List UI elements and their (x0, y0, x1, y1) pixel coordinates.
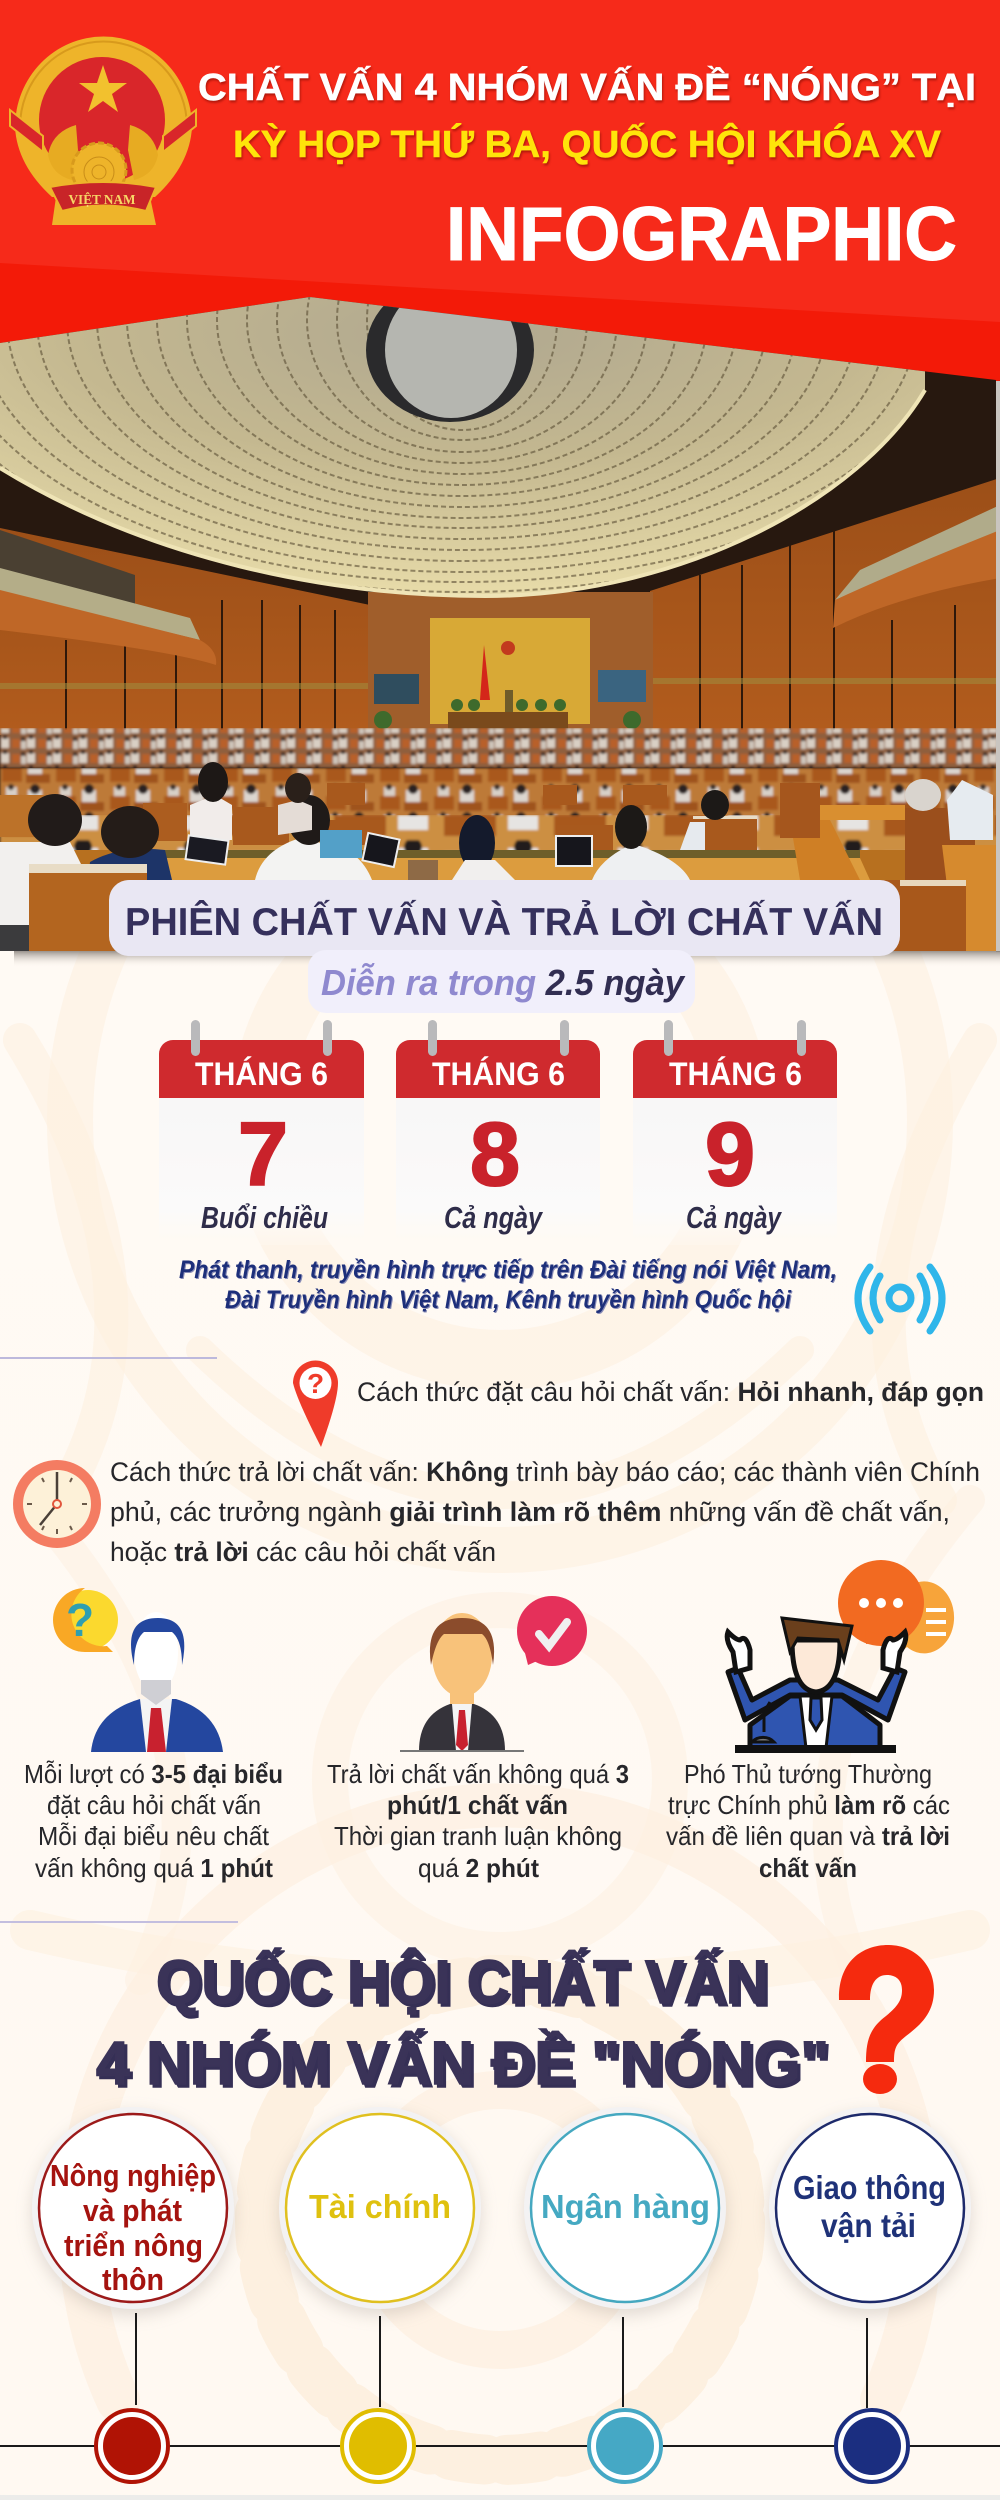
icon: answering official (400, 1596, 587, 1752)
icon: delegate asking question: ? (66, 1594, 94, 1646)
section heading: four hot issues (96, 1948, 829, 2097)
issue circle: agriculture (32, 2107, 234, 2309)
caption: answer time: Thời gian tranh luận không (334, 1821, 622, 1851)
section heading: four hot issues: 4 NHÓM VẤN ĐỀ "NÓNG" (96, 2029, 829, 2097)
issue circle: banking: Ngân hàng (541, 2188, 710, 2225)
issue circle: transport (769, 2107, 971, 2309)
question format text: Cách thức đặt câu hỏi chất vấn: Hỏi nhanh, đáp gọn (357, 1377, 984, 1407)
wall left (0, 528, 370, 735)
chamber photo (0, 297, 1000, 952)
calendar: 8 June: THÁNG 6 (432, 1056, 565, 1092)
caption: delegates: Mỗi lượt có 3-5 đại biểu (24, 1759, 283, 1789)
duration pill (308, 950, 695, 1013)
title line 1: CHẤT VẤN 4 NHÓM VẤN ĐỀ “NÓNG” TẠI (198, 65, 976, 109)
broadcast note: Phát thanh, truyền hình trực tiếp trên Đài tiếng nói Việt Nam, (179, 1256, 837, 1284)
caption: deputy prime minister: Phó Thủ tướng Thường (684, 1759, 932, 1789)
caption: delegates (24, 1759, 283, 1883)
caption: deputy prime minister: trực Chính phủ làm rõ các (668, 1790, 950, 1820)
issue circle: agriculture: thôn (102, 2262, 164, 2297)
calendar: 7 June: THÁNG 6 (195, 1056, 328, 1092)
icon: broadcast signal (858, 1267, 942, 1331)
answer format text: hoặc trả lời các câu hỏi chất vấn (110, 1537, 496, 1567)
calendar: 8 June (396, 1020, 600, 1245)
broadcast note (179, 1256, 837, 1314)
calendar: 9 June: 9 (705, 1105, 755, 1205)
duration text: Diễn ra trong 2.5 ngày (321, 962, 686, 1003)
foreground desks (165, 850, 860, 858)
caption: deputy prime minister: chất vấn (759, 1853, 857, 1883)
caption: answer time: phút/1 chất vấn (387, 1790, 568, 1820)
emblem motto: VIỆT NAM (68, 191, 136, 208)
seating (0, 728, 1000, 768)
issue circle: agriculture: Nông nghiệp (50, 2158, 216, 2193)
caption: deputy prime minister (666, 1759, 950, 1883)
issue circle: agriculture: triển nông (64, 2228, 203, 2263)
caption: answer time: quá 2 phút (418, 1853, 539, 1883)
timeline dot: transport (836, 2410, 908, 2482)
issue circle: banking (524, 2107, 726, 2309)
broadcast note: Đài Truyền hình Việt Nam, Kênh truyền hình Quốc hội (225, 1286, 792, 1314)
issue circle: transport: Giao thông (793, 2169, 946, 2206)
title line 3: INFOGRAPHIC (446, 192, 957, 277)
calendar: 9 June (633, 1020, 837, 1245)
oculus (366, 306, 534, 422)
caption: delegates: đặt câu hỏi chất vấn (47, 1790, 261, 1820)
calendar: 8 June: 8 (470, 1105, 520, 1205)
timeline dot: agriculture (96, 2410, 168, 2482)
header red banner (0, 0, 1000, 400)
issue circle: transport: vận tải (821, 2207, 916, 2244)
icon: deputy prime minister at podium (727, 1560, 954, 1753)
answer format text: Cách thức trả lời chất vấn: Không trình bày báo cáo; các thành viên Chính (110, 1457, 980, 1487)
center wall (368, 592, 653, 735)
calendar: 9 June: THÁNG 6 (669, 1056, 802, 1092)
caption: answer time (327, 1759, 629, 1883)
answer format text (110, 1457, 980, 1567)
timeline dot: finance (342, 2410, 414, 2482)
caption: deputy prime minister: vấn đề liên quan và trả lời (666, 1821, 950, 1851)
calendar: 7 June: Buổi chiều (201, 1200, 328, 1235)
calendar: 8 June: Cả ngày (444, 1200, 543, 1235)
photo bottom shadow (14, 951, 1000, 967)
caption: answer time: Trả lời chất vấn không quá 3 (327, 1759, 629, 1789)
national emblem (10, 37, 196, 225)
foreground people (0, 842, 82, 925)
title (198, 65, 976, 277)
icon: location pin with question mark: ? (307, 1368, 324, 1399)
icon: delegate asking question (53, 1588, 223, 1752)
caption: delegates: Mỗi đại biểu nêu chất (38, 1821, 270, 1851)
issue circle: agriculture: và phát (83, 2193, 182, 2228)
session heading pill (109, 880, 900, 956)
balconies (0, 530, 135, 604)
calendar: 7 June: 7 (238, 1105, 288, 1205)
icon: location pin with question mark (293, 1360, 338, 1447)
icon: clock (13, 1460, 101, 1548)
session heading text: PHIÊN CHẤT VẤN VÀ TRẢ LỜI CHẤT VẤN (125, 900, 883, 944)
timeline dot: banking (589, 2410, 661, 2482)
title line 2: KỲ HỌP THỨ BA, QUỐC HỘI KHÓA XV (233, 121, 942, 166)
calendar: 9 June: Cả ngày (686, 1200, 782, 1235)
section heading: four hot issues: QUỐC HỘI CHẤT VẤN (156, 1948, 768, 2016)
issue circle: finance: Tài chính (309, 2188, 451, 2225)
icon: red question mark (839, 1945, 934, 2094)
issue circle: finance (279, 2107, 481, 2309)
caption: delegates: vấn không quá 1 phút (35, 1853, 273, 1883)
timeline (0, 2313, 1000, 2482)
calendar: 7 June (159, 1020, 364, 1245)
answer format text: phủ, các trưởng ngành giải trình làm rõ thêm những vấn đề chất vấn, (110, 1497, 950, 1527)
